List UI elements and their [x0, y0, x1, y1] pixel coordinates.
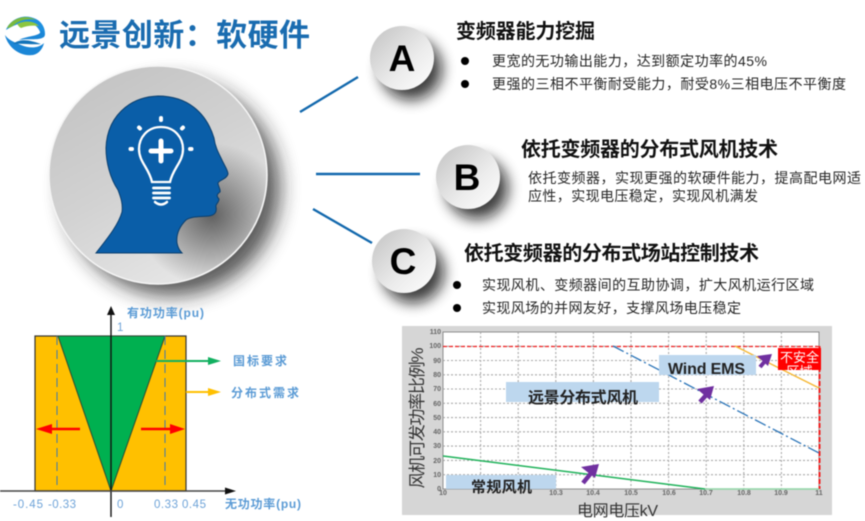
x ticks: 10.6 — [662, 490, 676, 497]
PQ capability chart — [0, 305, 301, 517]
badge B: B — [454, 157, 480, 198]
y ticks: 50 — [433, 415, 441, 422]
section B text — [521, 137, 861, 204]
x axis title: 电网电压kV — [577, 502, 658, 520]
conventional turbine line — [443, 456, 819, 489]
axis labels: -0.45 — [13, 499, 43, 511]
section B text: 应性，实现电压稳定，实现风机满发 — [528, 188, 758, 204]
section A text: 更宽的无功输出能力，达到额定功率的45% — [492, 53, 767, 69]
axis labels: 0.33 — [154, 499, 178, 511]
badge A — [370, 26, 442, 100]
arrow: improvement 3 — [757, 354, 772, 367]
y ticks: 0 — [437, 486, 441, 493]
badge C — [372, 229, 444, 303]
axis labels: 0 — [117, 499, 123, 511]
axis labels: -0.33 — [48, 499, 76, 511]
axis labels: 1 — [117, 322, 123, 334]
icon: light bulb with plus — [130, 118, 192, 204]
label: wind EMS: Wind EMS — [668, 361, 745, 378]
distributed requirement area — [35, 336, 186, 491]
axis labels: 国标要求 — [233, 353, 287, 368]
distributed turbine line — [613, 346, 819, 453]
label: conventional turbine — [446, 475, 556, 496]
x ticks: 11 — [815, 490, 823, 497]
y ticks: 70 — [433, 386, 441, 393]
y ticks: 20 — [433, 458, 441, 465]
label: unsafe zone: 区域 — [786, 364, 813, 379]
y ticks — [429, 329, 441, 493]
badge B — [436, 145, 508, 219]
axis labels: 有功功率(pu) — [127, 305, 204, 320]
x ticks: 10.4 — [586, 490, 600, 497]
y ticks: 80 — [433, 372, 441, 379]
voltage vs power chart — [402, 326, 832, 520]
chart background — [402, 326, 832, 515]
icon: head silhouette — [96, 96, 228, 253]
label: unsafe zone — [777, 347, 822, 371]
y ticks: 30 — [433, 443, 441, 450]
y ticks: 60 — [433, 401, 441, 408]
section B text: 依托变频器的分布式风机技术 — [521, 137, 778, 161]
x ticks: 10.5 — [624, 490, 638, 497]
badge A: A — [389, 38, 415, 79]
connector line C — [313, 209, 372, 243]
connector line B — [316, 173, 420, 175]
central head icon disc — [49, 66, 287, 296]
arrow: distributed demand — [186, 388, 221, 396]
arrow: improvement 1 — [581, 464, 599, 483]
section A text: 更强的三相不平衡耐受能力，耐受8%三相电压不平衡度 — [492, 76, 846, 92]
logo — [5, 17, 45, 55]
national standard triangle — [58, 336, 165, 491]
limit lines — [443, 346, 820, 489]
arrow: expand left — [36, 424, 80, 434]
connector line A — [300, 77, 358, 112]
y ticks: 110 — [430, 329, 441, 336]
axis labels: 分布式需求 — [231, 385, 299, 400]
x ticks — [439, 490, 823, 497]
axis labels: 无功功率(pu) — [225, 496, 301, 511]
axis labels — [13, 305, 301, 511]
arrow: improvement 2 — [697, 386, 714, 402]
label: unsafe zone: 不安全 — [780, 350, 819, 365]
section C text: 依托变频器的分布式场站控制技术 — [464, 241, 759, 265]
y ticks: 100 — [429, 343, 441, 350]
section C text: 实现风场的并网友好，支撑风场电压稳定 — [482, 300, 741, 316]
label: wind EMS — [659, 355, 756, 378]
badge C: C — [390, 241, 416, 282]
y ticks: 90 — [433, 358, 441, 365]
y ticks: 40 — [433, 429, 441, 436]
title: 远景创新：软硬件 — [59, 18, 310, 53]
axes — [0, 306, 236, 517]
x ticks: 10.3 — [549, 490, 563, 497]
arrow: national standard — [156, 357, 221, 365]
x ticks: 10.9 — [774, 490, 788, 497]
grid — [443, 332, 819, 489]
section B text: 依托变频器，实现更强的软硬件能力，提高配电网适 — [528, 170, 861, 186]
x ticks: 10.8 — [737, 490, 751, 497]
y ticks: 10 — [433, 472, 441, 479]
label: distributed turbine — [506, 382, 659, 407]
section A text — [456, 19, 846, 92]
wind EMS line — [735, 346, 819, 388]
section A text: 变频器能力挖掘 — [456, 19, 595, 43]
y axis title: 风机可发功率比例% — [408, 348, 427, 488]
x ticks: 10.7 — [699, 490, 713, 497]
section C text: 实现风机、变频器间的互助协调，扩大风机运行区域 — [482, 277, 814, 293]
section C text — [453, 241, 814, 316]
label: conventional turbine: 常规风机 — [471, 479, 532, 496]
axis labels: 0.45 — [182, 499, 206, 511]
label: distributed turbine: 远景分布式风机 — [528, 388, 638, 407]
plot area — [443, 332, 819, 489]
x ticks: 10 — [439, 490, 447, 497]
arrow: expand right — [141, 424, 185, 434]
